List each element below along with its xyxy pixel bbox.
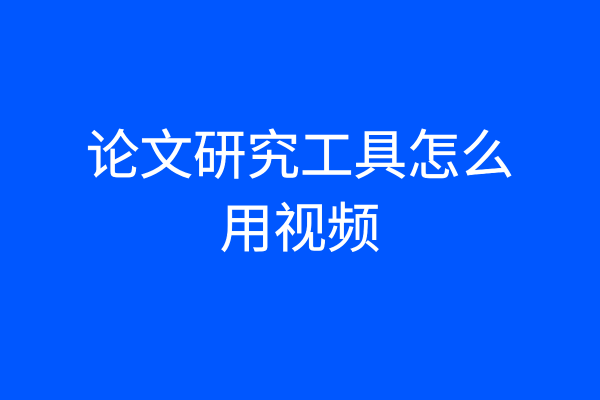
title: 用视频 <box>220 186 380 263</box>
title: 论文研究工具怎么 <box>86 113 514 190</box>
title <box>86 113 514 263</box>
